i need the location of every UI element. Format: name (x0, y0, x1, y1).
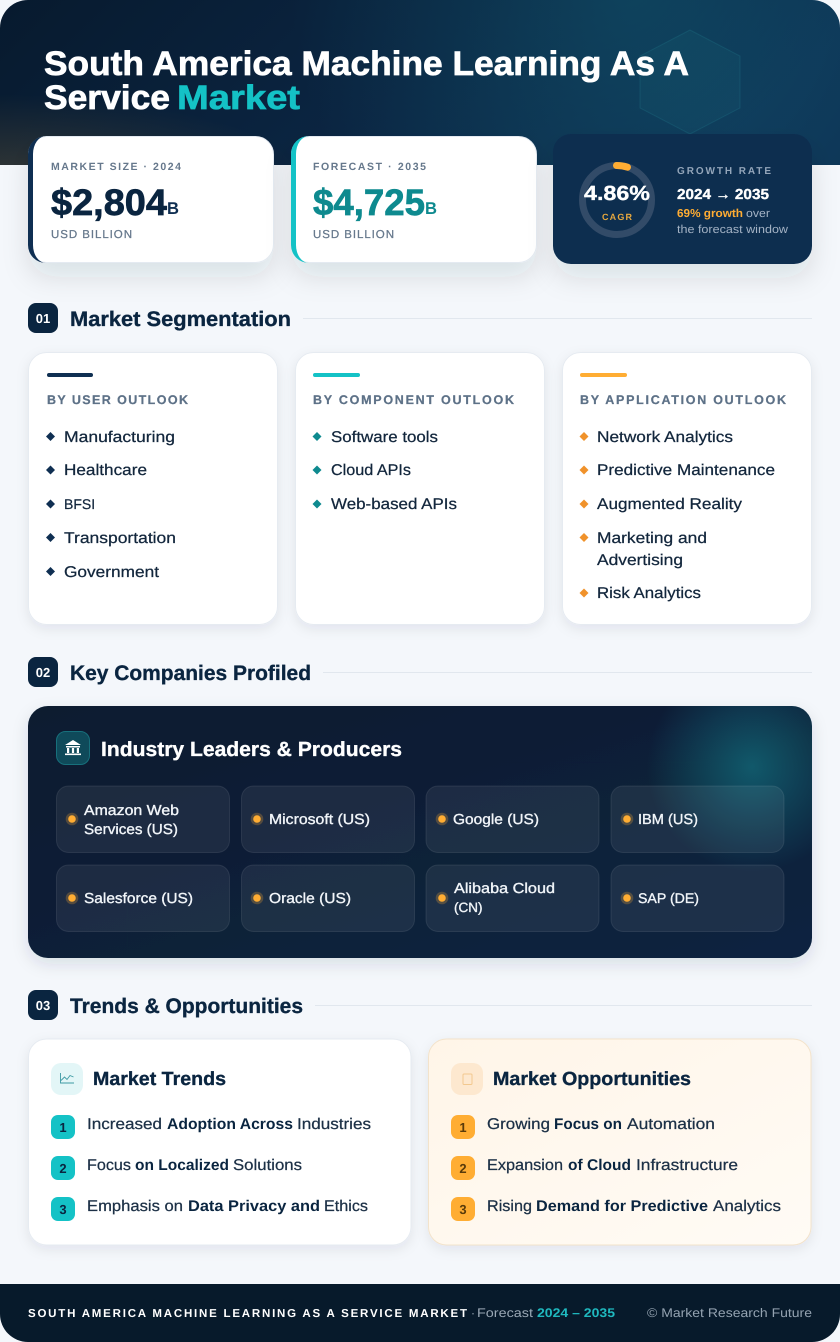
opportunity 3: Analytics (713, 1198, 781, 1215)
panel: by user outlook: Government (64, 564, 160, 581)
company chip: Microsoft (242, 786, 414, 852)
panel: by user outlook: Transportation (64, 530, 176, 547)
panel: by user outlook (28, 352, 278, 624)
section heading: trends and opportunities: Trends & Opportunities (70, 995, 303, 1018)
section heading: trends and opportunities (28, 990, 812, 1020)
chart: CAGR ring: CAGR (602, 212, 632, 222)
panel: industry leaders and producers (28, 706, 812, 958)
company chip: Salesforce (56, 865, 230, 932)
section heading: key companies profiled (28, 657, 812, 687)
trend 3 (51, 1197, 368, 1221)
trend 2: Focus (87, 1157, 131, 1174)
opportunity 2: Expansion (487, 1157, 563, 1174)
section heading: key companies profiled: 02 (36, 665, 50, 680)
panel: by component outlook: Cloud APIs (331, 462, 411, 479)
title: Market (177, 79, 300, 117)
title (44, 45, 689, 117)
trend 3: 3 (59, 1202, 67, 1217)
panel: market trends: Market Trends (93, 1069, 226, 1090)
icon: bank building (56, 732, 90, 764)
stat card: market size 2024: USD BILLION (51, 229, 132, 241)
company chip: Oracle (242, 865, 414, 932)
opportunity 2: of Cloud (568, 1157, 631, 1174)
footer (0, 1284, 840, 1342)
stat card: growth rate: 2024 → 2035 (677, 187, 769, 203)
stat card: forecast 2035 (291, 136, 536, 263)
panel: by application outlook: Network Analytics (597, 429, 733, 446)
section heading: trends and opportunities: 03 (36, 998, 50, 1013)
stat card: forecast 2035: FORECAST · 2035 (313, 161, 426, 173)
panel: by user outlook: Healthcare (64, 462, 147, 479)
opportunity 1: Focus on (554, 1116, 622, 1133)
title: Service (44, 79, 170, 117)
opportunity 2: Infrastructure (636, 1157, 738, 1174)
panel: by application outlook (562, 352, 812, 624)
company chip: Google (426, 786, 599, 852)
opportunity 2: 2 (459, 1161, 467, 1176)
opportunity 2 (451, 1156, 738, 1180)
trend 3: Emphasis on (87, 1198, 183, 1215)
stat card: market size 2024: MARKET SIZE · 2024 (51, 161, 181, 173)
panel: by application outlook: Risk Analytics (597, 585, 701, 602)
trend 1: Adoption Across (167, 1116, 293, 1133)
company chip: Amazon Web Services (56, 786, 230, 852)
panel: market opportunities: Market Opportunities (493, 1069, 691, 1090)
trend 2: Solutions (233, 1157, 302, 1174)
chart: CAGR ring: 4.86% (584, 182, 650, 205)
stat card: growth rate: 69% growth (677, 208, 743, 220)
panel: by application outlook: Advertising (597, 552, 683, 569)
company chip: SAP: SAP (DE) (638, 890, 699, 906)
stat card: market size 2024: B (167, 199, 179, 218)
opportunity 3 (451, 1197, 781, 1221)
trend 1 (51, 1115, 371, 1139)
stat card: growth rate: the forecast window (677, 224, 789, 236)
opportunity 3: Rising (487, 1198, 532, 1215)
stat card: forecast 2035: $4,725 (313, 182, 425, 223)
panel: market opportunities (428, 1039, 811, 1245)
trend 3: Data Privacy and (188, 1198, 320, 1215)
company chip: Salesforce: Salesforce (US) (84, 891, 193, 907)
header band (0, 0, 840, 165)
trend 1: 1 (59, 1120, 67, 1135)
company chip: Alibaba Cloud: (CN) (454, 900, 482, 915)
footer: · (471, 1306, 475, 1320)
panel: by application outlook: Augmented Reality (597, 496, 742, 513)
panel: by application outlook: Predictive Maintenance (597, 462, 775, 479)
panel: by user outlook: Manufacturing (64, 429, 175, 446)
company chip: Alibaba Cloud (426, 865, 599, 932)
stat card: market size 2024 (28, 136, 274, 263)
company chip: IBM (611, 786, 784, 852)
opportunity 3: Demand for Predictive (536, 1198, 708, 1215)
panel: by component outlook: Software tools (331, 429, 438, 446)
opportunity 1: Automation (627, 1116, 715, 1133)
company chip: Oracle: Oracle (US) (269, 891, 351, 907)
section heading: market segmentation: 01 (36, 311, 50, 326)
opportunity 1 (451, 1115, 715, 1139)
stat card: growth rate (553, 134, 812, 264)
company chip: Amazon Web Services: Amazon Web (84, 803, 179, 819)
company chip: SAP (611, 865, 784, 932)
stat card: growth rate: over (746, 208, 770, 220)
panel: by user outlook: BY USER OUTLOOK (47, 393, 188, 407)
company chip: Microsoft: Microsoft (US) (269, 812, 370, 828)
chart: CAGR ring (582, 165, 652, 234)
section heading: market segmentation (28, 303, 812, 333)
footer: Forecast (477, 1306, 534, 1320)
footer: 2024 – 2035 (537, 1306, 615, 1320)
icon: opportunity placeholder (451, 1063, 483, 1095)
panel: industry leaders and producers: Industry Leaders & Producers (101, 738, 402, 761)
trend 1: Industries (297, 1116, 371, 1133)
icon: line chart (51, 1063, 83, 1095)
company chip: Alibaba Cloud: Alibaba Cloud (454, 881, 555, 897)
panel: by component outlook: BY COMPONENT OUTLOOK (313, 393, 514, 407)
panel: market trends (28, 1039, 411, 1245)
opportunity 3: 3 (459, 1202, 467, 1217)
trend 2: 2 (59, 1161, 67, 1176)
panel: by application outlook: Marketing and (597, 530, 707, 547)
company chip: Amazon Web Services: Services (US) (84, 822, 178, 838)
icon: decorative hexagon (640, 30, 740, 134)
stat card: forecast 2035: B (425, 199, 437, 218)
stat card: forecast 2035: USD BILLION (313, 229, 394, 241)
company chip: IBM: IBM (US) (638, 812, 698, 828)
stat card: market size 2024: $2,804 (51, 182, 167, 223)
trend 1: Increased (87, 1116, 162, 1133)
section heading: key companies profiled: Key Companies Profiled (70, 662, 311, 685)
opportunity 1: 1 (459, 1120, 467, 1135)
company chip: Google: Google (US) (453, 812, 539, 828)
panel: by application outlook: BY APPLICATION OUTLOOK (580, 393, 786, 407)
trend 2: on Localized (135, 1157, 229, 1174)
trend 2 (51, 1156, 302, 1180)
footer: © Market Research Future (647, 1306, 812, 1320)
stat card: growth rate: GROWTH RATE (677, 166, 771, 177)
section heading: market segmentation: Market Segmentation (70, 308, 291, 331)
title: South America Machine Learning As A (44, 45, 689, 83)
panel: by user outlook: BFSI (64, 496, 95, 512)
trend 3: Ethics (324, 1198, 368, 1215)
panel: by component outlook: Web-based APIs (331, 496, 457, 513)
panel: by component outlook (296, 352, 544, 624)
opportunity 1: Growing (487, 1116, 550, 1133)
footer: SOUTH AMERICA MACHINE LEARNING AS A SERVICE MARKET (28, 1308, 467, 1320)
